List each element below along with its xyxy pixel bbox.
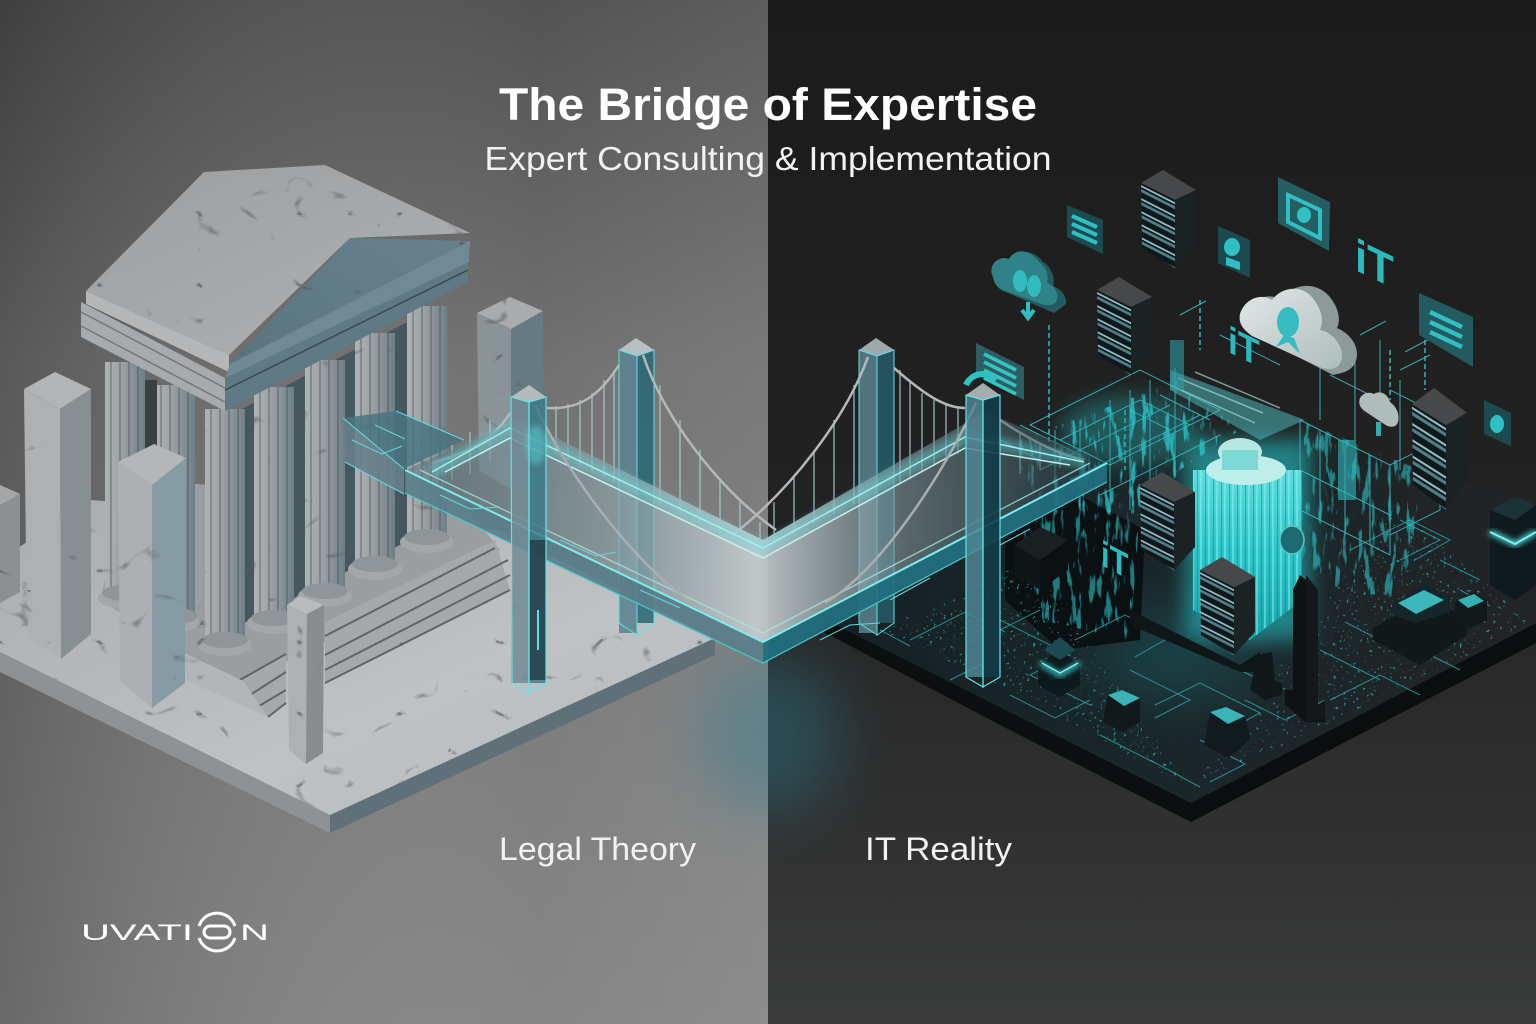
- base under core: [1130, 610, 1260, 672]
- short dark tower: [1250, 652, 1282, 700]
- panel: marble temple (Legal Theory): [0, 165, 715, 833]
- icon: small tile: [1484, 400, 1511, 446]
- server rack 1: [1141, 170, 1196, 268]
- icon: list tile: [1067, 205, 1103, 254]
- background: right dark half: [768, 0, 1536, 1024]
- front bridge cables: [535, 403, 976, 607]
- logo: UVATION: [81, 913, 269, 951]
- glowing cube 1: [1038, 637, 1080, 697]
- holographic glow cluster: [1020, 340, 1420, 640]
- front left tower: [511, 385, 546, 693]
- icon: large iT label: iT: [1355, 228, 1394, 299]
- marble pillar: behind bridge: [477, 297, 543, 500]
- chip cube 3: [1204, 707, 1250, 758]
- chip cube 2: [1103, 690, 1140, 732]
- holographic data structures: [1000, 301, 1440, 555]
- marble pillar: middle: [118, 444, 186, 708]
- icon: camera tile: [1278, 177, 1330, 251]
- dark tower: [1285, 575, 1325, 722]
- big iT floor letters: iT: [1101, 533, 1129, 588]
- big dark block with cyan top: [1373, 584, 1487, 665]
- bridge hangers: [452, 370, 1060, 552]
- panel: IT platform (IT Reality): [820, 170, 1536, 822]
- marble veining overlay: [0, 165, 715, 815]
- back columns: [98, 362, 202, 632]
- icon: small cloud: [1359, 392, 1399, 436]
- marble pillar: front small: [287, 596, 324, 764]
- server rack 2: [1097, 277, 1152, 375]
- floor specks: [880, 500, 1530, 790]
- back towers: [619, 338, 894, 635]
- icon: small iT label: iT: [1228, 318, 1260, 375]
- glowing data core: [1185, 438, 1310, 640]
- front right tower: [966, 383, 1000, 687]
- bridge deck: [405, 412, 1107, 663]
- title: The Bridge of Expertise: [499, 79, 1037, 130]
- panel: glass bridge: [405, 338, 1107, 693]
- marble platform: [0, 500, 715, 833]
- logo: UVATION: N: [240, 920, 269, 945]
- panel: floating cloud and app icons: [966, 177, 1511, 446]
- server rack 5: [1200, 557, 1255, 655]
- icon: white cloud: [1240, 286, 1357, 375]
- icon: user tile: [1218, 226, 1250, 278]
- temple roof: [86, 165, 470, 378]
- front colonnade: [198, 306, 454, 656]
- circuit traces on floor: [880, 520, 1490, 787]
- subtitle: Expert Consulting & Implementation: [484, 140, 1052, 177]
- dark block left: [1015, 527, 1068, 590]
- temple base and back wall: [100, 480, 500, 681]
- icon: document tile left: [966, 343, 1024, 400]
- temple steps: [186, 540, 510, 717]
- dark circuit platform: [820, 440, 1536, 822]
- icon: teal cloud with arrow: [991, 251, 1066, 318]
- background: left grey half: [0, 0, 768, 1024]
- label: IT Reality: IT Reality: [865, 831, 1012, 867]
- server rack 4: [1140, 472, 1195, 570]
- walkway from temple to bridge: [343, 411, 464, 494]
- server rack 3: [1412, 388, 1467, 510]
- logo: UVATION: UVATI: [81, 920, 193, 945]
- marble pillar: far left: [0, 485, 20, 603]
- bridge cables: [432, 355, 1084, 533]
- vertical dashed data lines: [1049, 300, 1425, 470]
- glowing block far right: [1490, 497, 1536, 600]
- temple entablature: [81, 262, 468, 411]
- label: Legal Theory: Legal Theory: [499, 831, 696, 867]
- icon: document tile right: [1419, 293, 1473, 367]
- marble pillar: left tall: [24, 372, 91, 659]
- glow under the bridge: [700, 655, 840, 815]
